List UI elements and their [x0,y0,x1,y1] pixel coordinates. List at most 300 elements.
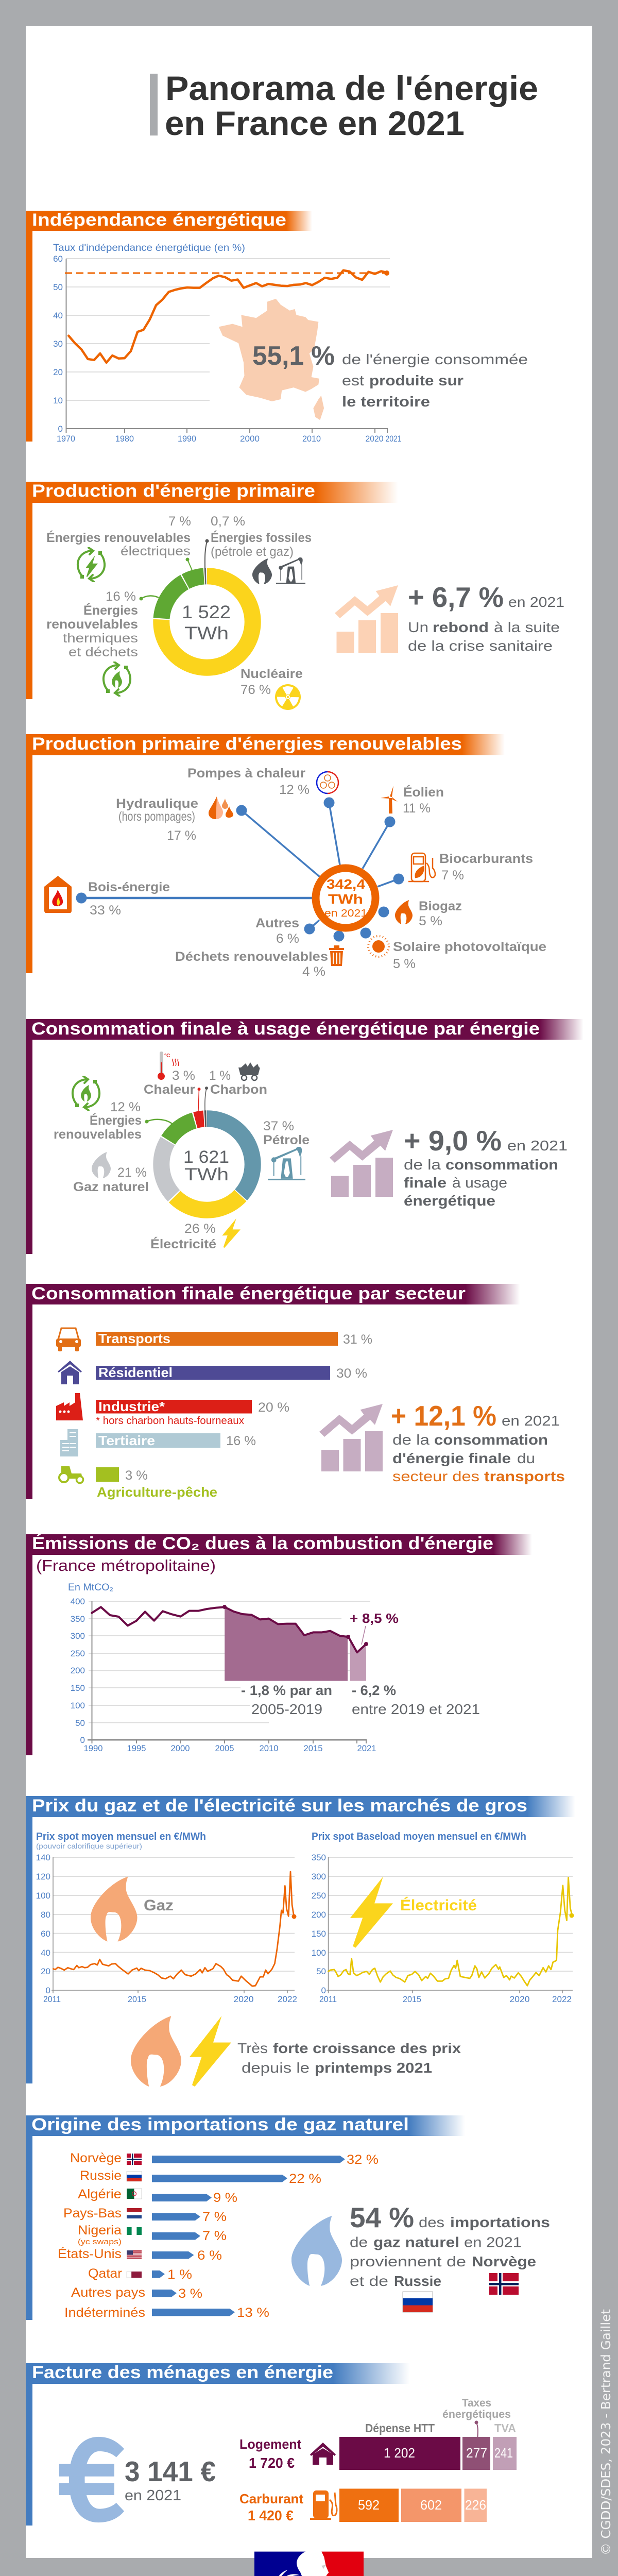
stacked bars: logement et carburant: Taxes [462,2397,491,2409]
callout: 55,1 % [252,341,528,410]
flag: Norvège [489,2273,519,2295]
bar chart: secteurs: 30 % [336,1366,367,1381]
icon: flamme et derrick [252,557,305,584]
line chart: émissions: + 8,5 % [350,1611,399,1626]
callout: + 12,1 %: du [517,1450,535,1466]
bar chart: pays: 3 % [178,2286,202,2301]
bar chart: pays: Qatar [88,2266,122,2281]
callout: 54 %: gaz naturel [373,2234,459,2250]
icon: maison logement [310,2443,336,2465]
bar chart: secteurs: 16 % [226,1434,256,1448]
line chart: taux d'indépendance: 30 [53,339,63,349]
total: 3 141 €: 3 141 € [125,2455,216,2487]
line chart: gaz: Gaz [144,1897,174,1914]
line chart: gaz: 2015 [128,1994,146,2004]
line chart: émissions: 300 [71,1631,85,1641]
callout: 54 %: en 2021 [464,2234,522,2250]
bar chart: secteurs [96,1331,372,1500]
callout: 55,1 %: de l'énergie consommée [342,351,528,367]
total: 3 141 € [125,2455,216,2504]
icon: usine [56,1393,83,1420]
callout: 54 %: et de [350,2273,388,2289]
callout: + 9,0 %: à usage [452,1175,507,1191]
line chart: taux d'indépendance: 1970 [57,434,75,444]
callout: + 12,1 %: en 2021 [502,1413,560,1429]
donut labels: Pétrole [263,1133,310,1147]
heading: prix [26,1796,575,2083]
spoke labels: 17 % [167,828,196,843]
bar chart: pays [58,2151,379,2320]
hub: 342,4 TWh [316,868,375,928]
bar chart: pays: États-Unis [58,2246,122,2261]
icon: poubelle [329,945,344,966]
icon: croissance production [335,585,398,653]
panel: émissions de CO2 [26,1534,532,1755]
heading: indépendance [26,210,312,442]
line chart: émissions: 2015 [304,1743,322,1753]
line chart: gaz: 20 [41,1967,50,1976]
leader lines [139,539,209,601]
line chart: émissions: 400 [71,1597,85,1606]
bar chart: pays: 22 % [289,2172,321,2186]
icon: thermomètre: °C [164,1053,170,1059]
icon: croissance consommation [330,1130,393,1197]
icon: maison [58,1361,82,1384]
spoke labels: 4 % [302,964,325,979]
bar chart: pays: 1 % [167,2267,192,2282]
bar chart: pays: Pays-Bas [63,2206,122,2221]
heading: consommation par secteur: Consommation finale énergétique par secteur [31,1284,466,1303]
line chart: taux d'indépendance: Taux d'indépendance énergétique (en %) [53,243,245,253]
bar chart: secteurs: 31 % [343,1332,372,1347]
bar chart: secteurs: 20 % [258,1400,289,1415]
spoke labels: Éolien [403,785,444,800]
donut labels: Énergies renouvelables [46,530,191,545]
bar chart: pays: 9 % [213,2191,237,2205]
callout: + 6,7 %: en 2021 [508,594,564,610]
donut labels: Chaleur [144,1082,195,1097]
callout: baisse 2019-2021 [352,1683,480,1717]
callout: forte croissance: forte croissance des prix [273,2040,461,2056]
donut labels: 16 % [106,589,136,604]
stacked bars: logement et carburant: 1 720 € [249,2455,295,2471]
callout: + 6,7 % [408,581,564,654]
bar chart: secteurs: Tertiaire [98,1433,155,1448]
donut labels: Gaz naturel [73,1180,149,1194]
line chart: émissions: 200 [71,1666,85,1675]
callout: 54 %: de [350,2234,368,2250]
line chart: émissions: 150 [71,1683,85,1693]
heading: indépendance: Indépendance énergétique [32,210,286,230]
spoke labels: (hors pompages) [118,809,195,824]
icon: immeubles [60,1429,78,1456]
callout: 55,1 %: le territoire [342,394,430,410]
callout: + 12,1 %: transports [484,1468,565,1484]
donut chart: consommation [161,1118,253,1210]
line chart: émissions: 1995 [127,1743,146,1753]
bar chart: secteurs: Agriculture-pêche [97,1484,217,1500]
bar chart: pays: Russie [80,2168,122,2183]
donut labels: Charbon [210,1082,267,1097]
panel: indépendance énergétique [26,210,528,444]
callout: + 9,0 %: énergétique [404,1193,495,1209]
stacked bars: logement et carburant: 1 420 € [248,2507,294,2523]
heading: émissions [26,1534,532,1755]
line chart: électricité: 150 [312,1929,326,1939]
callout: 54 %: Russie [394,2273,441,2289]
total: 3 141 €: en 2021 [125,2487,181,2504]
line chart: émissions: En MtCO₂ [68,1582,113,1593]
line chart: gaz: 60 [41,1929,50,1939]
line chart: gaz: 2022 [278,1994,297,2004]
heading: émissions: Émissions de CO₂ dues à la combustion d'énergie [32,1534,493,1553]
icon: éolienne [381,786,398,814]
donut labels: Énergies fossiles [211,530,312,545]
donut labels: électriques [121,544,191,558]
stacked bars: logement et carburant: 226 [465,2497,486,2513]
panel: consommation par secteur [26,1284,565,1500]
line chart: électricité: 350 [312,1853,326,1862]
donut labels: 26 % [184,1222,216,1236]
donut labels: 37 % [263,1119,294,1133]
callout: 55,1 %: 55,1 % [252,341,335,371]
callout: baisse 2019-2021: - 6,2 % [352,1683,396,1698]
donut labels [54,1069,310,1251]
stacked bars: logement et carburant: 602 [420,2497,442,2513]
line chart: gaz: Prix spot moyen mensuel en €/MWh [36,1831,206,1842]
spoke labels: 12 % [279,783,310,797]
callout: + 9,0 % [404,1125,568,1209]
line chart: électricité [312,1831,574,2004]
line chart: taux d'indépendance: 0 [58,424,63,434]
icon: renouvelables thermiques [104,662,130,696]
donut labels: thermiques [63,631,138,646]
line chart: taux d'indépendance: 2020 [366,434,383,444]
spoke labels: 5 % [393,957,416,971]
stacked bars: logement et carburant: énergétiques [442,2409,511,2420]
spoke labels: Autres [255,916,299,930]
line chart: taux d'indépendance [53,243,402,444]
heading: renouvelables: Production primaire d'énergies renouvelables [32,734,462,754]
line chart: électricité: 2011 [319,1994,337,2004]
credit: © CGDD/SDES, 2023 - Bertrand Gaillet [598,2309,613,2555]
line chart: taux d'indépendance: 40 [53,311,63,320]
line chart: électricité: 0 [321,1986,326,1995]
donut labels: et déchets [68,645,138,659]
bar chart: pays: 13 % [237,2306,269,2320]
line chart: électricité: 50 [316,1967,326,1976]
spoke labels: Déchets renouvelables [175,950,328,964]
spoke labels: 5 % [419,914,442,928]
bar chart: pays: Nigeria [78,2223,122,2238]
callout: + 9,0 %: en 2021 [507,1138,568,1154]
line chart: gaz: 80 [41,1910,50,1920]
callout: forte croissance: Très [237,2040,268,2056]
donut labels: renouvelables [46,617,138,632]
callout: 54 %: importations [450,2214,550,2230]
heading: consommation par énergie: Consommation finale à usage énergétique par énergie [31,1019,540,1039]
callout: + 6,7 %: + 6,7 % [408,581,504,613]
callout: + 6,7 %: Un [408,619,428,635]
spoke labels: Bois-énergie [88,880,170,894]
icon: biocarburant [408,853,435,882]
line chart: émissions: 250 [71,1649,85,1658]
flag: Russie [403,2292,433,2312]
stacked bars: logement et carburant: 592 [358,2497,380,2513]
donut labels: 76 % [241,683,271,697]
icon: nucléaire [275,684,301,710]
stacked bars: logement et carburant: 1 202 [384,2445,415,2461]
heading: facture: Facture des ménages en énergie [32,2363,333,2382]
icon: énergies renouvelables [73,1076,99,1110]
line chart: émissions: 100 [71,1701,85,1710]
line chart: taux d'indépendance: 1990 [178,434,196,444]
callout: baisse 2019-2021: entre 2019 et 2021 [352,1701,480,1717]
line chart: taux d'indépendance: 60 [53,254,63,264]
bar chart: pays: 7 % [202,2210,227,2224]
line chart: taux d'indépendance: 2010 [302,434,321,444]
donut total: TWh [184,623,229,643]
callout: + 9,0 %: + 9,0 % [404,1125,502,1157]
spoke labels: Solaire photovoltaïque [393,940,546,954]
donut labels: 7 % [168,514,191,529]
heading: production: Production d'énergie primaire [32,481,315,501]
line chart: électricité: 300 [312,1872,326,1882]
donut total [182,602,231,643]
callout: + 12,1 % [391,1400,565,1484]
donut labels: Énergies [83,603,138,618]
hub: 342,4 TWh: TWh [328,891,363,907]
bar chart: secteurs: Transports [98,1331,170,1346]
line chart: émissions: 2021 [357,1743,376,1753]
callout: + 9,0 %: de la [404,1157,441,1173]
stacked bars: logement et carburant: 277 [466,2445,487,2461]
callout: 54 %: proviennent de [350,2253,466,2269]
spoke labels: 7 % [441,868,464,883]
donut labels: Nucléaire [241,667,303,681]
donut labels: renouvelables [54,1127,142,1142]
heading: renouvelables [26,734,505,973]
callout: 54 %: Norvège [472,2253,536,2269]
line chart: émissions [68,1582,399,1753]
bar chart: pays: Indéterminés [64,2306,145,2320]
donut total: 1 621 [183,1147,229,1167]
subtitle: (France métropolitaine) [36,1556,216,1574]
stacked bars: logement et carburant [239,2397,517,2523]
line chart: électricité: Prix spot Baseload moyen mensuel en €/MWh [312,1831,526,1842]
icon: derrick pétrole [268,1147,305,1180]
bar chart: pays: Algérie [78,2187,122,2201]
callout: forte croissance: printemps 2021 [315,2060,432,2076]
callout: 54 %: des [419,2214,444,2230]
callout: + 12,1 %: de la [392,1432,430,1448]
donut chart: production [161,576,253,668]
spoke labels: 6 % [276,931,299,946]
icon: croissance secteur [319,1404,383,1471]
line chart: émissions: 2000 [171,1743,190,1753]
line chart: électricité: 2020 [510,1994,529,2004]
callout: forte croissance: depuis le [242,2060,310,2076]
line chart: taux d'indépendance: 10 [53,396,63,405]
icon: pompe à chaleur [317,772,338,793]
line chart: électricité: 250 [312,1891,326,1901]
line chart: taux d'indépendance: 2021 [385,434,402,444]
line chart: gaz: 100 [36,1891,50,1901]
line chart: gaz: 140 [36,1853,50,1862]
callout: + 6,7 %: de la crise sanitaire [408,638,553,654]
line chart: taux d'indépendance: 20 [53,367,63,377]
line chart: électricité: Électricité [400,1896,477,1914]
donut total [183,1147,229,1184]
callout: + 9,0 %: finale [404,1175,447,1191]
donut labels: 12 % [110,1100,141,1114]
line chart: électricité: 100 [312,1948,326,1958]
icon: flamme et éclair [131,2016,231,2087]
bar chart: pays: Autres pays [71,2285,145,2300]
bar chart: secteurs: Industrie* [98,1399,165,1414]
leader lines [145,1087,208,1124]
icon: thermomètre [158,1052,179,1080]
bar chart: pays: 7 % [202,2229,227,2243]
icon: wagon de charbon [238,1062,260,1080]
line chart: gaz: 120 [36,1872,50,1882]
icon: tracteur [59,1466,83,1483]
line chart: électricité: 2015 [403,1994,421,2004]
stacked bars: logement et carburant: 241 [494,2445,513,2461]
line chart: gaz: 0 [46,1986,50,1995]
line chart: électricité: 2022 [552,1994,572,2004]
callout: + 6,7 %: rebond [433,619,489,635]
donut total: TWh [184,1165,229,1184]
bar chart: pays: 32 % [347,2153,379,2167]
heading: origine: Origine des importations de gaz naturel [31,2115,409,2134]
bar chart: secteurs: Résidentiel [98,1365,173,1380]
stacked bars: logement et carburant: TVA [494,2421,516,2435]
panel: origine des importations [26,2115,550,2320]
line chart: émissions: 350 [71,1614,85,1624]
line chart: émissions: 0 [80,1735,85,1745]
donut labels: 3 % [172,1069,195,1083]
panel: consommation finale par énergie [26,1019,583,1254]
line chart: émissions: 50 [75,1718,85,1728]
title: en France en 2021 [165,104,465,142]
callout: 55,1 %: est [342,372,364,388]
bar chart: pays: 6 % [197,2248,222,2263]
line chart: gaz: 40 [41,1948,50,1958]
donut labels: Électricité [150,1236,216,1251]
donut labels: 1 % [209,1069,231,1083]
donut labels: 21 % [117,1165,147,1180]
line chart: gaz [36,1831,297,2004]
heading: origine [26,2115,465,2320]
callout: baisse 2005-2019 [241,1683,332,1717]
spoke labels: Biocarburants [439,852,533,866]
callout: + 12,1 %: d'énergie finale [392,1450,511,1466]
spoke labels: Pompes à chaleur [187,766,305,781]
line chart: gaz: 2020 [234,1994,253,2004]
heading: consommation par secteur [26,1284,520,1499]
icon: renouvelables électriques [78,548,105,582]
line chart: taux d'indépendance: 50 [53,282,63,292]
spoke labels: Biogaz [419,899,462,913]
callout: 55,1 %: produite sur [369,372,464,388]
callout: + 12,1 %: secteur des [392,1468,479,1484]
bar chart: pays: (yc swaps) [78,2238,122,2246]
heading: prix: Prix du gaz et de l'électricité sur les marchés de gros [32,1796,527,1816]
line chart: émissions: 2005 [215,1743,234,1753]
donut labels: (pétrole et gaz) [211,545,294,559]
line chart: émissions: 1990 [83,1743,103,1753]
flags [127,2154,142,2278]
icon: pompe carburant [310,2490,337,2520]
donut labels [46,514,312,697]
callout: baisse 2005-2019: 2005-2019 [251,1701,322,1717]
spoke labels [88,766,546,979]
donut total: 1 522 [182,602,231,622]
line chart: électricité: 200 [312,1910,326,1920]
line chart: gaz: (pouvoir calorifique supérieur) [36,1842,142,1850]
icon: euro [59,2437,124,2522]
bar chart: secteurs: 3 % [125,1468,148,1483]
icon: gouttes [209,796,233,819]
panel: production primaire d'énergies renouvelables [26,734,546,979]
line chart: taux d'indépendance: 2000 [240,434,260,444]
bar chart: pays: Norvège [70,2151,122,2165]
heading: facture [26,2363,410,2526]
map: France [219,299,324,420]
spoke labels: 33 % [90,903,121,918]
heading: consommation par énergie [26,1019,583,1254]
heading: production [26,481,398,699]
icon: flamme biogaz [395,900,413,924]
icon: poêle à bois [44,876,72,913]
bar chart: secteurs: * hors charbon hauts-fourneaux [96,1415,244,1427]
icon: éclair [222,1218,241,1248]
callout: + 12,1 %: consommation [434,1432,548,1448]
icon: soleil [368,936,389,957]
stacked bars: logement et carburant: Logement [239,2436,301,2452]
stacked bars: logement et carburant: Carburant [239,2491,303,2506]
icon: voiture [56,1328,81,1351]
callout: + 12,1 %: + 12,1 % [391,1400,496,1432]
stacked bars: logement et carburant: Dépense HTT [365,2421,435,2435]
title [150,69,538,142]
callout: 54 %: 54 % [350,2201,414,2233]
callout: + 9,0 %: consommation [445,1157,558,1173]
line chart: gaz: 2011 [43,1994,61,2004]
callout: forte croissance [237,2040,461,2076]
panel: production d'énergie primaire [26,481,564,710]
line chart: émissions: 2010 [260,1743,278,1753]
logo: République française [254,2552,364,2576]
spoke labels: 11 % [403,801,431,816]
callout: + 6,7 %: à la suite [494,619,560,635]
hub: 342,4 TWh: en 2021 [324,908,367,919]
callout: baisse 2005-2019: - 1,8 % par an [241,1683,332,1698]
donut labels: Énergies [90,1113,142,1128]
spoke labels: Hydraulique [116,796,198,811]
icon: flamme bleue [291,2216,342,2286]
icon: flamme gaz [92,1152,111,1178]
panel: prix du gaz et de l'électricité [26,1796,575,2087]
callout: 54 % [350,2201,550,2289]
donut labels: 0,7 % [211,514,245,529]
panel: facture des ménages [26,2363,517,2526]
line chart: taux d'indépendance: 1980 [115,434,134,444]
hub: 342,4 TWh: 342,4 [327,876,366,892]
spoke chart [76,798,404,942]
title: Panorama de l'énergie [165,69,538,107]
